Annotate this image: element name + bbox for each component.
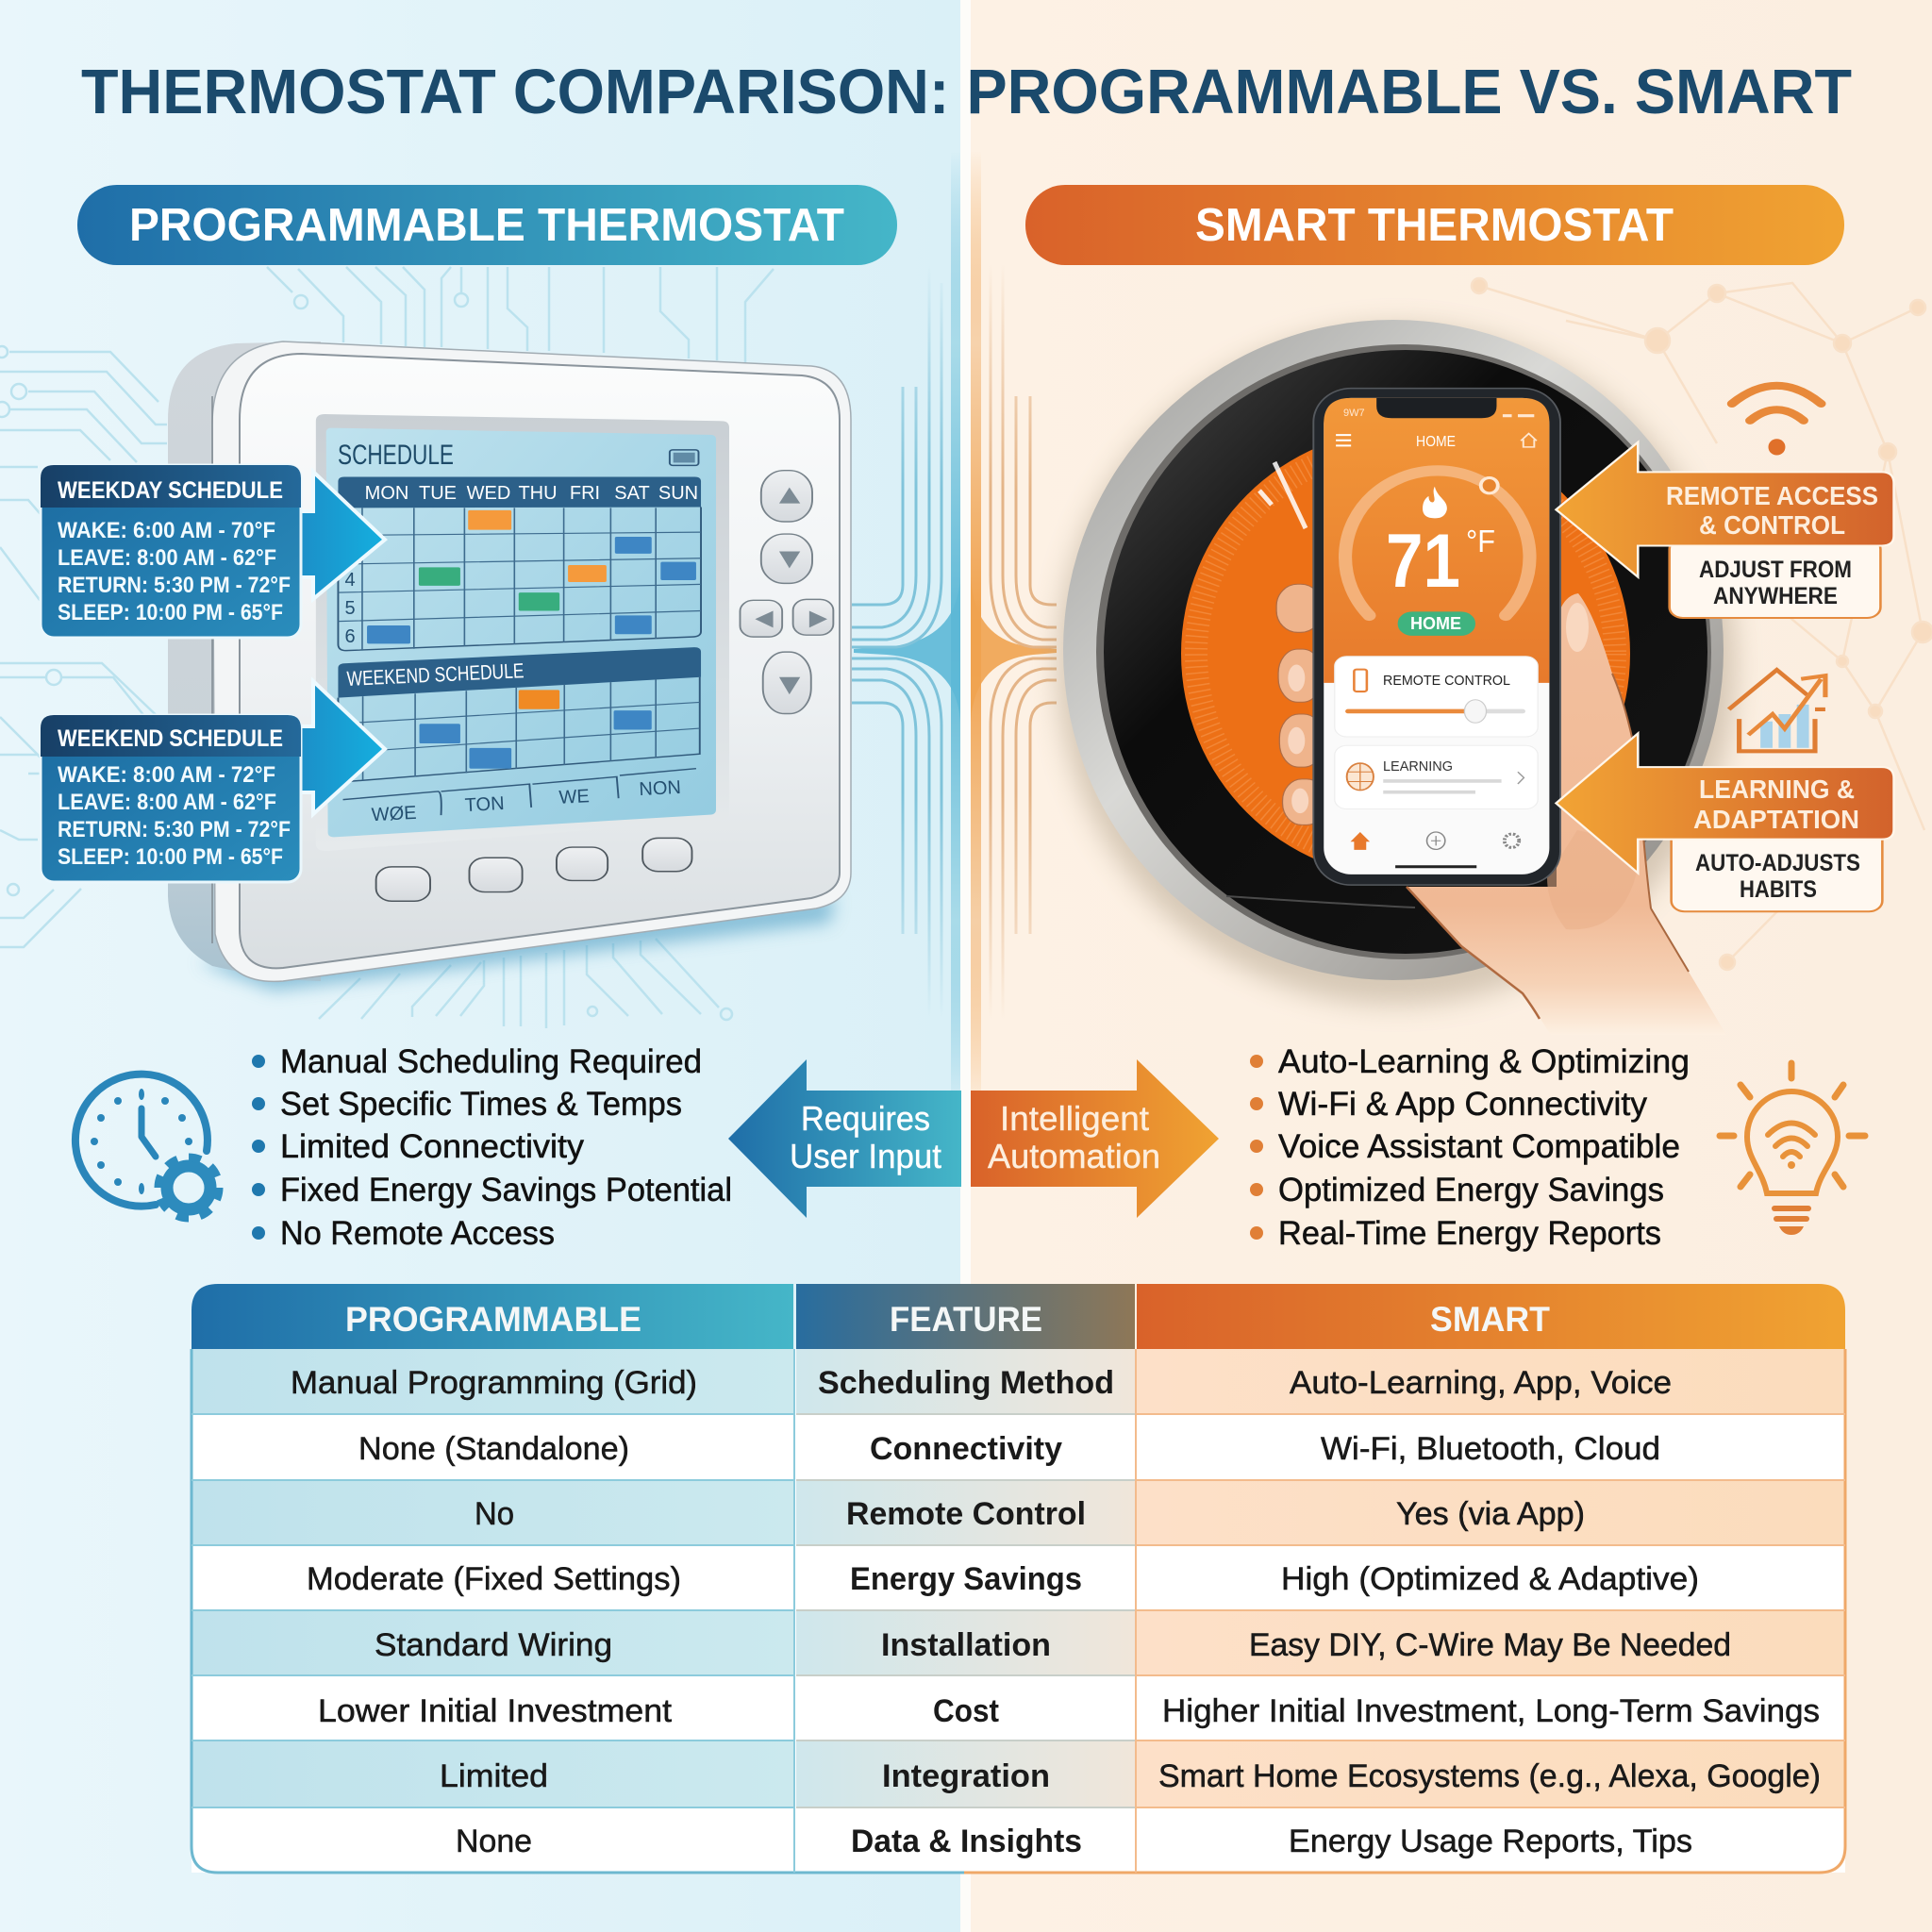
table header bbox=[192, 1284, 1845, 1349]
callout: weekday schedule: RETURN: 5:30 PM - 72°F bbox=[58, 573, 291, 598]
row: scheduling method: Scheduling Method bbox=[818, 1365, 1114, 1401]
bullet list: programmable: Set Specific Times & Temps bbox=[280, 1086, 682, 1123]
bullet list: smart: Wi-Fi & App Connectivity bbox=[1278, 1086, 1648, 1123]
circuit lines converging at centre, left bbox=[852, 264, 941, 1019]
row: remote control: Remote Control bbox=[846, 1496, 1086, 1532]
row: data and insights: None bbox=[456, 1824, 532, 1859]
bullet list: programmable: No Remote Access bbox=[280, 1215, 555, 1252]
arrow: requires user input bbox=[728, 1059, 961, 1218]
illustration: smart thermostat with phone in hand: °F bbox=[1466, 524, 1495, 558]
callout: remote access and control: ANYWHERE bbox=[1713, 583, 1838, 609]
illustration: programmable thermostat device: SAT bbox=[614, 483, 650, 504]
phone bbox=[1313, 389, 1560, 885]
icon: clock with gear bbox=[75, 1074, 219, 1218]
callout: weekday schedule bbox=[41, 465, 385, 638]
row: energy savings bbox=[307, 1561, 1699, 1597]
row: installation bbox=[375, 1627, 1731, 1663]
row: scheduling method: Manual Programming (Grid) bbox=[291, 1365, 697, 1401]
callout: weekend schedule bbox=[41, 681, 385, 882]
bullet list: smart: Real-Time Energy Reports bbox=[1278, 1215, 1661, 1252]
row: integration bbox=[440, 1758, 1821, 1794]
table header: PROGRAMMABLE bbox=[345, 1300, 641, 1339]
row: connectivity: None (Standalone) bbox=[358, 1431, 629, 1467]
illustration: programmable thermostat device: 5 bbox=[344, 598, 356, 619]
row: scheduling method bbox=[291, 1365, 1672, 1401]
row: energy savings: Moderate (Fixed Settings) bbox=[307, 1561, 681, 1597]
row: data and insights: Energy Usage Reports, Tips bbox=[1289, 1824, 1692, 1859]
icon: wifi bbox=[1732, 386, 1821, 456]
row: integration: Integration bbox=[882, 1758, 1050, 1794]
illustration: programmable thermostat device: WØE bbox=[371, 803, 417, 825]
row: cost bbox=[318, 1693, 1820, 1729]
row: remote control: Yes (via App) bbox=[1396, 1496, 1585, 1532]
arrow: requires user input: Requires bbox=[801, 1099, 930, 1138]
icon: house with rising chart bbox=[1729, 670, 1825, 751]
heading: programmable thermostat bbox=[77, 185, 897, 265]
table header: FEATURE bbox=[890, 1300, 1042, 1339]
callout: remote access and control: & CONTROL bbox=[1699, 510, 1845, 540]
table header: SMART bbox=[1430, 1300, 1550, 1339]
row: integration: Smart Home Ecosystems (e.g., Alexa, Google) bbox=[1158, 1758, 1821, 1794]
row: cost: Lower Initial Investment bbox=[318, 1693, 673, 1729]
bullet list: programmable: Manual Scheduling Required bbox=[280, 1043, 702, 1080]
row: data and insights bbox=[456, 1824, 1692, 1859]
row: installation: Easy DIY, C-Wire May Be Needed bbox=[1249, 1627, 1731, 1663]
hand bbox=[1407, 593, 1726, 1035]
fingers bbox=[1276, 584, 1326, 824]
comparison table bbox=[192, 1284, 1845, 1873]
heading: smart thermostat bbox=[1025, 185, 1844, 265]
row: installation: Standard Wiring bbox=[375, 1627, 612, 1663]
bullet list: programmable: Limited Connectivity bbox=[280, 1128, 584, 1165]
row: connectivity bbox=[358, 1431, 1660, 1467]
control buttons bbox=[376, 471, 833, 901]
bullet list: smart: Optimized Energy Savings bbox=[1278, 1172, 1664, 1208]
callout: weekday schedule: WAKE: 6:00 AM - 70°F bbox=[58, 518, 275, 543]
bullet list: smart: Auto-Learning & Optimizing bbox=[1278, 1043, 1690, 1080]
callout: weekend schedule: WAKE: 8:00 AM - 72°F bbox=[58, 762, 275, 788]
row: remote control: No bbox=[475, 1496, 514, 1532]
heading: programmable thermostat: PROGRAMMABLE THERMOSTAT bbox=[129, 200, 844, 251]
callout: weekday schedule: SLEEP: 10:00 PM - 65°F bbox=[58, 600, 283, 625]
arrow: intelligent automation bbox=[971, 1059, 1219, 1218]
callout: remote access and control bbox=[1556, 442, 1894, 618]
illustration: programmable thermostat device: WE bbox=[558, 786, 590, 808]
illustration: programmable thermostat device: THU bbox=[518, 483, 558, 504]
callout: weekend schedule: RETURN: 5:30 PM - 72°F bbox=[58, 817, 291, 842]
callout: weekend schedule: SLEEP: 10:00 PM - 65°F bbox=[58, 844, 283, 870]
callout: weekday schedule: WEEKDAY SCHEDULE bbox=[58, 477, 283, 504]
background: programmable side bbox=[0, 0, 963, 1932]
illustration: programmable thermostat device: TUE bbox=[419, 483, 457, 504]
heading: smart thermostat: SMART THERMOSTAT bbox=[1195, 200, 1674, 251]
illustration: programmable thermostat device: WEEKEND SCHEDULE bbox=[346, 658, 525, 691]
callout: learning and adaptation: AUTO-ADJUSTS bbox=[1695, 850, 1860, 876]
bullet list: smart: Voice Assistant Compatible bbox=[1278, 1128, 1680, 1165]
illustration: smart thermostat with phone in hand: HOME bbox=[1416, 434, 1456, 450]
bullet list: programmable: Fixed Energy Savings Potential bbox=[280, 1172, 732, 1208]
row: scheduling method: Auto-Learning, App, Voice bbox=[1290, 1365, 1672, 1401]
illustration: programmable thermostat device: TON bbox=[464, 793, 505, 816]
illustration: smart thermostat with phone in hand: LEARNING bbox=[1383, 758, 1453, 774]
illustration: programmable thermostat device: FRI bbox=[570, 483, 600, 504]
circuit lines converging at centre, right bbox=[991, 264, 1057, 1019]
arrow: requires user input: User Input bbox=[790, 1137, 941, 1175]
row: cost: Higher Initial Investment, Long-Term Savings bbox=[1162, 1693, 1820, 1729]
illustration: programmable thermostat device: MON bbox=[365, 483, 408, 504]
illustration: programmable thermostat device: WED bbox=[467, 483, 510, 504]
row: data and insights: Data & Insights bbox=[851, 1824, 1082, 1859]
row: connectivity: Wi-Fi, Bluetooth, Cloud bbox=[1321, 1431, 1660, 1467]
callout: learning and adaptation: LEARNING & bbox=[1699, 774, 1855, 804]
illustration: programmable thermostat device: 4 bbox=[344, 570, 356, 591]
illustration: programmable thermostat device: NON bbox=[639, 777, 681, 800]
bullet list: smart bbox=[1250, 1043, 1690, 1252]
row: energy savings: High (Optimized & Adaptive) bbox=[1281, 1561, 1699, 1597]
network pattern bbox=[1472, 278, 1932, 970]
illustration: smart thermostat with phone in hand bbox=[1057, 320, 1736, 1035]
row: remote control bbox=[475, 1496, 1585, 1532]
icon: light bulb with wifi bbox=[1720, 1063, 1865, 1235]
callout: remote access and control: ADJUST FROM bbox=[1699, 557, 1852, 583]
arrow: intelligent automation: Intelligent bbox=[1000, 1099, 1149, 1138]
illustration: programmable thermostat device: 6 bbox=[344, 626, 356, 647]
callout: learning and adaptation: ADAPTATION bbox=[1693, 805, 1859, 834]
callout: learning and adaptation: HABITS bbox=[1740, 876, 1817, 903]
callout: weekday schedule: LEAVE: 8:00 AM - 62°F bbox=[58, 545, 276, 571]
row: installation: Installation bbox=[881, 1627, 1051, 1663]
bullet list: programmable bbox=[252, 1043, 732, 1252]
callout: learning and adaptation bbox=[1556, 733, 1894, 911]
callout: remote access and control: REMOTE ACCESS bbox=[1666, 481, 1878, 510]
illustration: smart thermostat with phone in hand: 9W7 bbox=[1343, 408, 1365, 419]
status icons bbox=[1503, 413, 1534, 419]
row: energy savings: Energy Savings bbox=[850, 1561, 1082, 1597]
illustration: smart thermostat with phone in hand: 71 bbox=[1386, 519, 1460, 604]
callout: weekend schedule: WEEKEND SCHEDULE bbox=[58, 725, 283, 752]
illustration: programmable thermostat device bbox=[168, 341, 851, 991]
callout: weekend schedule: LEAVE: 8:00 AM - 62°F bbox=[58, 790, 276, 815]
illustration: programmable thermostat device: SUN bbox=[658, 483, 698, 504]
row: integration: Limited bbox=[440, 1758, 548, 1794]
arrow: intelligent automation: Automation bbox=[988, 1137, 1160, 1175]
title: THERMOSTAT COMPARISON: PROGRAMMABLE VS. SMART bbox=[81, 57, 1852, 127]
illustration: smart thermostat with phone in hand: REMOTE CONTROL bbox=[1383, 673, 1510, 689]
illustration: programmable thermostat device: SCHEDULE bbox=[338, 440, 454, 471]
background: smart side bbox=[963, 0, 1932, 1932]
row: cost: Cost bbox=[933, 1693, 999, 1729]
row: connectivity: Connectivity bbox=[870, 1431, 1062, 1467]
illustration: smart thermostat with phone in hand: HOME bbox=[1410, 614, 1461, 633]
